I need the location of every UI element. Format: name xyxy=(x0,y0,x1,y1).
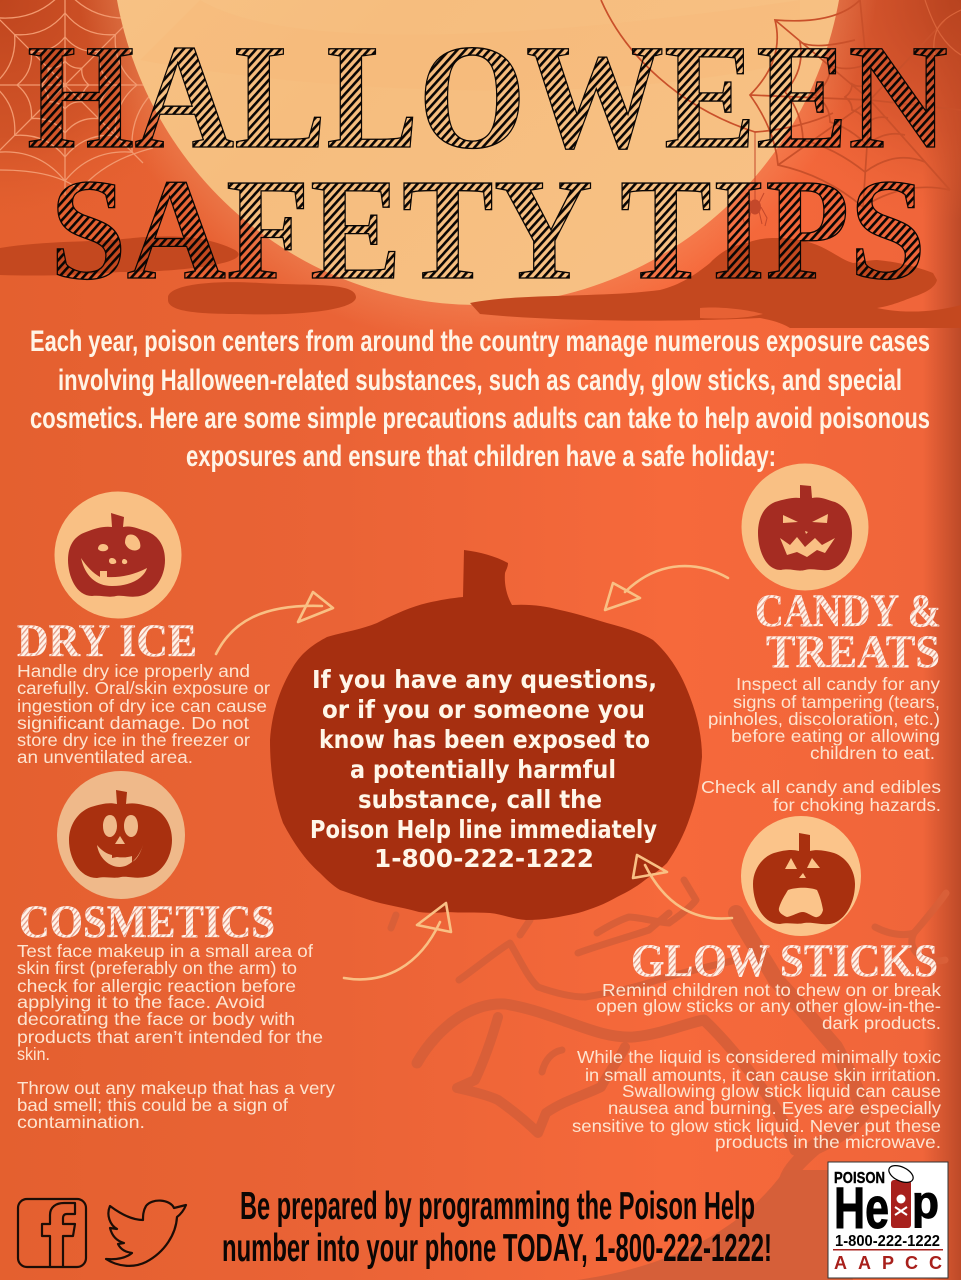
candy text: for choking hazards. xyxy=(773,795,941,815)
poison help logo: AAPCC xyxy=(834,1253,942,1273)
glow sticks text: nausea and burning. Eyes are especially xyxy=(608,1098,941,1118)
dry ice text: Handle dry ice properly and xyxy=(17,661,250,681)
dry ice text: an unventilated area. xyxy=(17,747,193,767)
dry ice text: ingestion of dry ice can cause xyxy=(17,696,267,716)
spider xyxy=(743,132,767,226)
callout text: substance, call the xyxy=(358,785,602,814)
callout text: Poison Help line immediately xyxy=(310,815,657,844)
poison help logo xyxy=(828,1162,948,1278)
intro paragraph xyxy=(30,325,930,473)
glow sticks text: dark products. xyxy=(822,1013,941,1033)
spider web: top left xyxy=(0,0,175,195)
icon: smiling pumpkin xyxy=(57,771,185,899)
candy text: Check all candy and edibles xyxy=(701,777,941,797)
cosmetics text: products that aren’t intended for the xyxy=(17,1027,323,1047)
icon: spooked pumpkin xyxy=(741,816,861,936)
heading: dry ice: DRY ICE xyxy=(17,615,197,667)
title line: Safety Tips: SAFETY TIPS xyxy=(50,150,926,310)
candy text xyxy=(701,674,941,815)
poison help logo: He xyxy=(834,1176,889,1241)
cosmetics text: applying it to the face. Avoid xyxy=(17,992,265,1012)
dry ice text: carefully. Oral/skin exposure or xyxy=(17,678,270,698)
callout text: 1-800-222-1222 xyxy=(374,844,594,873)
callout text: or if you or someone you xyxy=(322,695,645,724)
cloud silhouettes xyxy=(0,236,961,328)
panel: dry ice xyxy=(17,492,270,767)
candy text: children to eat. xyxy=(810,743,935,763)
poison help logo: 1-800-222-1222 xyxy=(835,1233,940,1250)
cosmetics text: skin. xyxy=(17,1044,50,1064)
faint web far right xyxy=(925,0,961,60)
icon: angry pumpkin xyxy=(742,464,868,590)
candy text: signs of tampering (tears, xyxy=(733,692,940,712)
candy text: before eating or allowing xyxy=(731,726,940,746)
cosmetics text: decorating the face or body with xyxy=(17,1009,295,1029)
glow sticks text xyxy=(572,980,941,1152)
glow sticks text: Remind children not to chew on or break xyxy=(602,980,941,1000)
heading: candy and treats xyxy=(755,585,941,678)
dry ice text: store dry ice in the freezer or xyxy=(17,730,250,750)
arrow: cosmetics to pumpkin xyxy=(344,903,451,979)
cosmetics text: Throw out any makeup that has a very xyxy=(17,1078,335,1098)
icon: winking pumpkin xyxy=(54,492,182,618)
cosmetics text: Test face makeup in a small area of xyxy=(17,941,313,961)
icon: poison bottle xyxy=(886,1162,916,1228)
central pumpkin callout xyxy=(270,550,702,920)
panel: glow sticks xyxy=(572,816,941,1152)
arrow: candy to pumpkin xyxy=(605,566,728,610)
arrow: dry ice to pumpkin xyxy=(216,592,333,654)
spider web: top right xyxy=(601,0,961,207)
glow sticks text: in small amounts, it can cause skin irritation. xyxy=(585,1065,941,1085)
cosmetics text: contamination. xyxy=(17,1112,145,1132)
callout text xyxy=(310,665,657,873)
glow sticks text: products in the microwave. xyxy=(715,1132,941,1152)
heading: cosmetics: COSMETICS xyxy=(19,896,275,948)
cosmetics text xyxy=(17,941,335,1132)
panel: cosmetics xyxy=(17,771,335,1132)
cosmetics text: check for allergic reaction before xyxy=(17,976,296,996)
glow sticks text: While the liquid is considered minimally toxic xyxy=(577,1047,941,1067)
callout text: know has been exposed to xyxy=(319,725,650,754)
moon xyxy=(111,0,845,305)
arrow: glow sticks to pumpkin xyxy=(633,855,732,919)
poison help logo: p xyxy=(912,1176,939,1228)
footer call to action xyxy=(222,1185,772,1270)
glow sticks text: Swallowing glow stick liquid can cause xyxy=(622,1081,941,1101)
dry ice text: significant damage. Do not xyxy=(17,713,249,733)
icon: facebook xyxy=(18,1199,86,1267)
poison help logo: POISON xyxy=(834,1170,885,1187)
panel: candy and treats xyxy=(701,464,941,815)
glow sticks text: sensitive to glow stick liquid. Never put these xyxy=(572,1116,941,1136)
heading: candy and treats: TREATS xyxy=(766,626,940,678)
callout text: If you have any questions, xyxy=(312,665,657,694)
cosmetics text: skin first (preferably on the arm) to xyxy=(17,958,297,978)
heading: glow sticks: GLOW STICKS xyxy=(631,935,938,987)
callout text: a potentially harmful xyxy=(350,755,616,784)
candy text: pinholes, discoloration, etc.) xyxy=(708,709,940,729)
background tree silhouette xyxy=(391,880,946,1180)
icon: twitter bird xyxy=(106,1201,186,1266)
pumpkin shape xyxy=(270,550,702,920)
dry ice text xyxy=(17,661,270,767)
cosmetics text: bad smell; this could be a sign of xyxy=(17,1095,288,1115)
title xyxy=(27,14,948,310)
glow sticks text: open glow sticks or any other glow-in-the- xyxy=(596,996,941,1016)
candy text: Inspect all candy for any xyxy=(736,674,940,694)
